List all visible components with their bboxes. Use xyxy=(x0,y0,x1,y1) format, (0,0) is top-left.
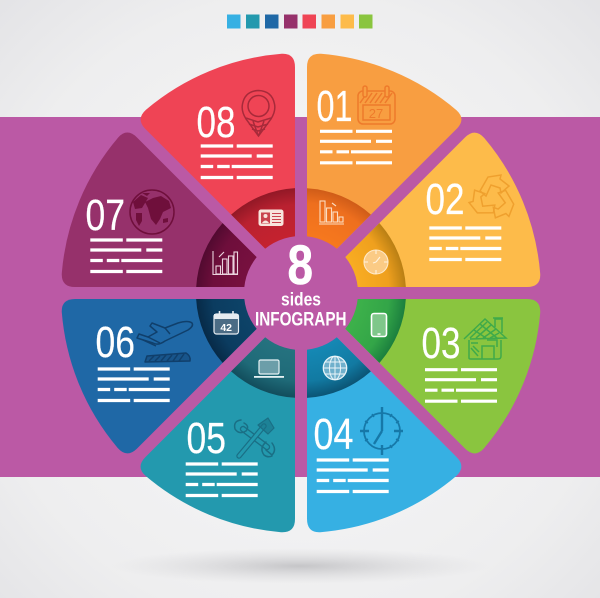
icon: bars up xyxy=(213,251,238,274)
panel: 07 xyxy=(62,133,286,287)
number 01: 01 xyxy=(316,82,352,131)
icon: calendar xyxy=(358,86,395,124)
inner ring segment 02 xyxy=(315,223,425,332)
big number 8: 8 xyxy=(288,233,313,296)
text lines 05 xyxy=(186,464,258,496)
icon: clock xyxy=(360,407,403,455)
text lines 08 xyxy=(201,146,273,178)
text lines 03 xyxy=(425,370,497,401)
text lines 06 xyxy=(98,369,170,400)
panel: 01 xyxy=(307,54,461,278)
inner ring segment 03 xyxy=(316,299,406,363)
text lines 01 xyxy=(320,131,392,163)
icon: laptop xyxy=(254,360,284,378)
icon: tools xyxy=(235,418,274,457)
panel: 03 xyxy=(316,299,540,453)
wedge 04 xyxy=(198,307,466,576)
icon: calendar: 27 xyxy=(369,106,383,121)
icon: globe xyxy=(323,356,347,380)
text lines 04 xyxy=(317,460,389,492)
inner ring segment 05 xyxy=(231,308,295,398)
panel: 02 xyxy=(315,128,584,396)
icon: airplane xyxy=(137,322,192,362)
icon: calendar 42: 42 xyxy=(220,322,232,334)
number 08: 08 xyxy=(196,98,236,147)
number 03: 03 xyxy=(422,319,460,368)
inner ring segment 08 xyxy=(231,169,340,279)
number 05: 05 xyxy=(186,414,226,463)
centre disc xyxy=(244,233,358,350)
wedge 06 xyxy=(18,190,287,458)
panel: 06 xyxy=(18,190,287,458)
text lines 02 xyxy=(429,228,501,260)
number 02: 02 xyxy=(426,175,464,224)
inner ring segment 01 xyxy=(307,188,371,278)
purple band xyxy=(0,117,600,477)
icon: calendar 42 xyxy=(214,311,238,334)
icon: map pin xyxy=(242,90,275,136)
inner ring segment 07 xyxy=(196,223,286,287)
ground shadow xyxy=(110,548,490,584)
label infograph: INFOGRAPH xyxy=(255,308,346,330)
wedge 03 xyxy=(316,299,540,453)
label sides: sides xyxy=(281,290,321,310)
icon: recycle xyxy=(465,175,519,223)
wedge 05 xyxy=(141,308,295,532)
inner ring segment 04 xyxy=(262,307,371,417)
icon: tablet xyxy=(372,314,386,336)
panel: 05 xyxy=(141,308,295,532)
icon: clock small xyxy=(364,250,388,274)
wedge 02 xyxy=(315,128,584,396)
wedge 07 xyxy=(62,133,286,287)
icon: world globe xyxy=(130,190,174,234)
number 07: 07 xyxy=(86,191,125,240)
wedge 08 xyxy=(136,10,404,279)
text lines 07 xyxy=(90,240,162,272)
inner ring segment 06 xyxy=(177,254,287,363)
icon: id card xyxy=(258,210,284,226)
colour legend xyxy=(227,14,372,28)
wedge 01 xyxy=(307,54,461,278)
panel: 08 xyxy=(136,10,404,279)
number 06: 06 xyxy=(96,318,135,367)
panel: 04 xyxy=(198,307,466,576)
icon: house xyxy=(464,318,506,359)
number 04: 04 xyxy=(314,410,354,459)
icon: bar chart down xyxy=(319,201,344,224)
